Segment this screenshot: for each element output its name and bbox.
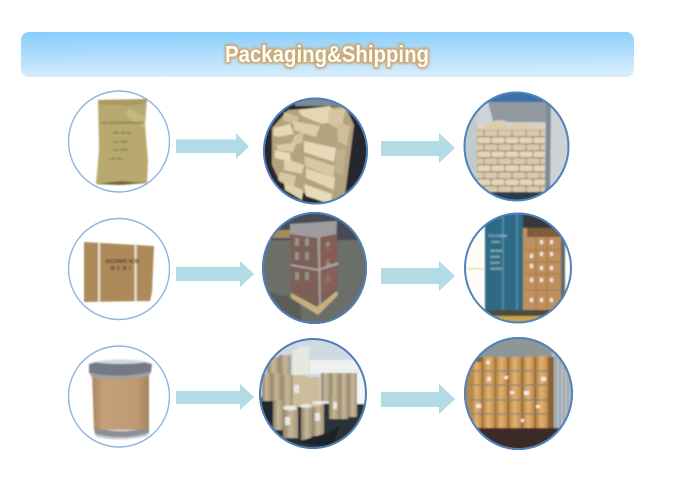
row 2 step 3: container with cartons — [463, 212, 572, 325]
row 2 step 2: wrapped pallet of cartons — [260, 210, 372, 326]
row 3 arrow 1 — [176, 384, 254, 410]
row 2 step 3: container with cartons: 30480 — [490, 250, 503, 254]
row 2 step 3: container with cartons: 26350 — [490, 268, 503, 272]
row 2 step 1: carton box in circle: 维生素C — [110, 265, 132, 272]
row 3 step 1: fibre drum in circle — [68, 346, 170, 447]
row 1 step 2: stacked bags on pallet — [262, 96, 370, 206]
row 2 step 3: container with cartons: 3150 — [490, 262, 500, 266]
row 1 step 1: paper bag in circle — [68, 91, 170, 192]
row 1 arrow 1 — [176, 133, 249, 159]
row 1 arrow 2 — [381, 133, 455, 163]
row 3 step 2: warehouse of drums — [258, 337, 370, 452]
row 2 step 1: carton box in circle: ASCORBIC ACID — [105, 259, 139, 265]
row 3 arrow 2 — [381, 384, 455, 414]
row 2 step 1: carton box in circle — [68, 218, 170, 320]
title: Packaging&Shipping — [225, 41, 429, 67]
row 1 step 1: paper bag in circle: NW: 25 KG — [113, 131, 131, 135]
row 1 step 3: bags loaded in container — [462, 90, 572, 204]
row 3 step 3: container loaded with drums — [462, 336, 576, 452]
title glow: Packaging&Shipping — [225, 41, 429, 67]
row 1 step 1: paper bag in circle: LR: 2020 — [113, 148, 128, 152]
row 2 step 3: container with cartons: TCLU3050 — [488, 235, 508, 239]
row 2 step 3: container with cartons: 4000 — [490, 256, 500, 260]
row 1 step 1: paper bag in circle: LOT NO.: — [109, 157, 124, 161]
row 2 arrow 1 — [176, 261, 254, 287]
row 1 step 1: paper bag in circle: LR: 1902 — [113, 140, 128, 144]
row 1 step 1: paper bag in circle: CALCIUM TRICHLOROETHANATE — [101, 121, 144, 125]
row 2 arrow 2 — [381, 261, 455, 291]
row 2 step 3: container with cartons: 22G1 — [491, 241, 501, 245]
title banner — [21, 32, 634, 77]
